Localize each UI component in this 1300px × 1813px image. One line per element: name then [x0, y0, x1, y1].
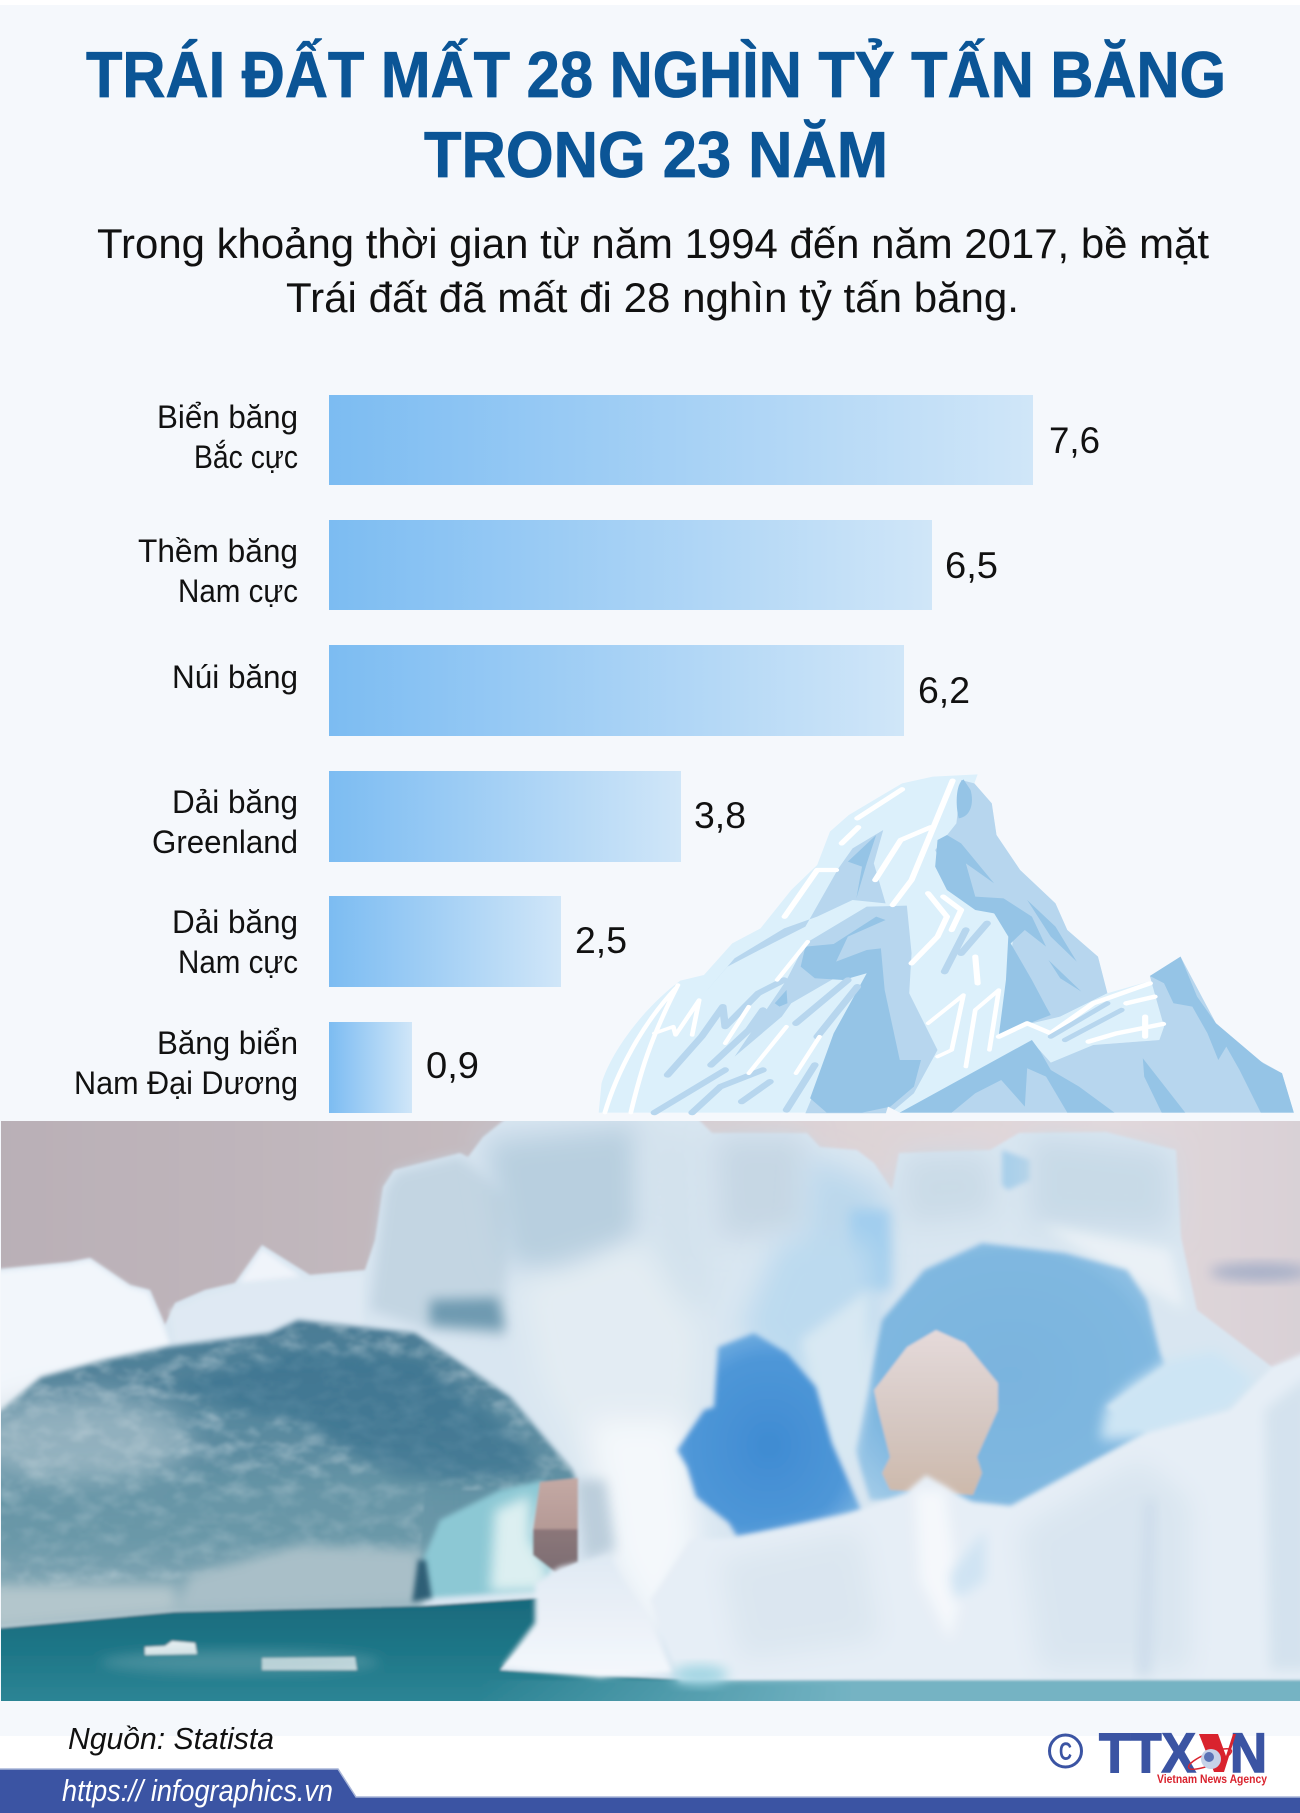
bar row: Núi băng [172, 645, 970, 736]
bar row: Băng biển Nam Đại Dương: Nam Đại Dương [74, 1065, 298, 1101]
bar chart [74, 395, 1100, 1113]
bar row: Dải băng Nam cực: Nam cực [178, 944, 298, 980]
bar row: Thềm băng Nam cực [138, 520, 998, 610]
title: TRONG 23 NĂM [424, 118, 888, 191]
bar row: Dải băng Nam cực: 2,5 [575, 920, 627, 961]
inner ice cave [423, 1480, 552, 1598]
bar row: Biển băng Bắc cực: Bắc cực [194, 439, 298, 475]
cyan glow at the pillar foot [672, 1665, 728, 1685]
arch dark top [170, 1350, 540, 1480]
subtitle [97, 220, 1209, 321]
ice block shading [720, 1375, 1300, 1676]
arch bottom bands [0, 1545, 425, 1628]
water [1, 1596, 836, 1701]
dark left arch [0, 1320, 576, 1628]
background sea through the arch [533, 1478, 578, 1572]
footer bar with URL [0, 1769, 1300, 1813]
bar row: Thềm băng Nam cực: Thềm băng [138, 533, 298, 569]
blue arch right [855, 1243, 1165, 1507]
bar row: Biển băng Bắc cực: 7,6 [1049, 420, 1100, 461]
bar row: Băng biển Nam Đại Dương: 0,9 [426, 1045, 479, 1086]
bar row: Núi băng: 6,2 [918, 670, 970, 711]
source: Nguồn: Statista [68, 1721, 274, 1756]
wordmark: TTXVN [1099, 1721, 1267, 1784]
blue cave left [677, 1333, 861, 1537]
subtitle: Trái đất đã mất đi 28 nghìn tỷ tấn băng. [286, 274, 1019, 321]
subtitle: Trong khoảng thời gian từ năm 1994 đến năm 2017, bề mặt [97, 220, 1209, 267]
bar row: Núi băng: Núi băng [172, 659, 298, 695]
far left iceberg highlights [1, 1250, 298, 1410]
bar row: Biển băng Bắc cực: Biển băng [157, 399, 298, 435]
arch opening [874, 1330, 998, 1495]
upper right ice blocks [715, 1136, 1185, 1400]
bar row: Băng biển Nam Đại Dương [74, 1022, 479, 1113]
right ice block [650, 1350, 1300, 1682]
bar row: Dải băng Greenland: Dải băng [172, 784, 298, 820]
ice wall and pillar shading [370, 1125, 710, 1650]
agency name: Vietnam News Agency [1157, 1772, 1267, 1786]
bar row: Dải băng Greenland: Greenland [152, 824, 298, 860]
waterline glow [515, 1679, 1300, 1701]
arch left leg shading [800, 1290, 868, 1470]
inner cave highlight [490, 1495, 548, 1592]
logo: TTXVN [1050, 1721, 1267, 1786]
photo: iceberg with arches [0, 1110, 1300, 1710]
bar row: Băng biển Nam Đại Dương: Băng biển [157, 1025, 298, 1061]
sky [1, 1121, 1300, 1367]
arch lower shading [0, 1470, 430, 1570]
bar row: Thềm băng Nam cực: Nam cực [178, 573, 298, 609]
foreground ice chunk [502, 1555, 672, 1678]
title [86, 38, 1226, 191]
bar row: Dải băng Greenland [152, 771, 746, 862]
arch light patch [0, 1395, 190, 1485]
inner cave dark crack [412, 1560, 432, 1602]
arch rim highlight [1100, 1350, 1255, 1440]
arch mottling [0, 1320, 580, 1590]
bar row: Thềm băng Nam cực: 6,5 [945, 545, 998, 586]
red V and globe [1186, 1734, 1236, 1773]
ice mass [0, 1112, 1300, 1710]
copyright mark: C [1059, 1738, 1072, 1766]
bar row: Biển băng Bắc cực [157, 395, 1100, 485]
bar row: Dải băng Greenland: 3,8 [694, 795, 746, 836]
copyright mark [1050, 1735, 1082, 1767]
footer bar with URL: https:// infographics.vn [62, 1773, 333, 1808]
icon: iceberg mountain illustration [599, 774, 1294, 1114]
title: TRÁI ĐẤT MẤT 28 NGHÌN TỶ TẤN BĂNG [86, 38, 1226, 111]
bar row: Dải băng Nam cực: Dải băng [172, 904, 298, 940]
water highlights [100, 1641, 380, 1674]
bar row: Dải băng Nam cực [172, 896, 627, 987]
